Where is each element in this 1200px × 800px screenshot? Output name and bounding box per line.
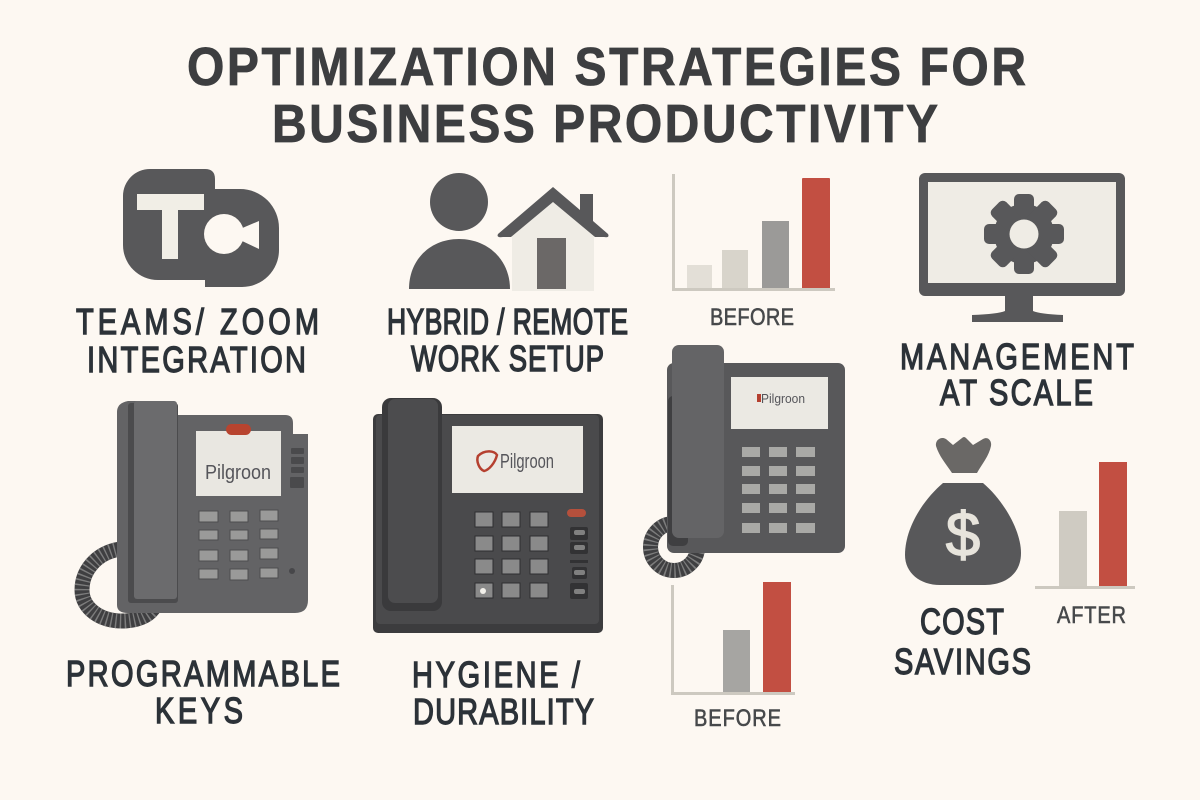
panel: Hybrid / remote work setup	[387, 173, 628, 379]
label: Programmable Keys	[66, 653, 340, 731]
icon: person and house	[409, 173, 608, 291]
label: Hygiene / Durability: HYGIENE /	[412, 654, 581, 695]
label: After: AFTER	[1057, 601, 1126, 628]
icon: money bag	[905, 437, 1021, 585]
panel: Teams / Zoom integration	[76, 169, 319, 380]
label: Management at Scale	[900, 336, 1134, 413]
panel: before bar chart, top	[672, 174, 835, 330]
bar chart: four rising bars	[672, 174, 835, 291]
label: Hygiene / Durability: DURABILITY	[413, 691, 594, 732]
label: Teams / Zoom Integration: INTEGRATION	[87, 339, 306, 380]
label: Before: BEFORE	[710, 303, 794, 330]
label: Cost Savings: SAVINGS	[894, 641, 1031, 682]
icon: T and camera badge	[123, 169, 279, 287]
title	[187, 36, 1026, 154]
panel: hygiene / durability	[373, 398, 603, 732]
icon: desk phone with side keys	[82, 401, 308, 621]
label: Management at Scale: MANAGEMENT	[900, 336, 1134, 377]
icon: desk phone with looped cord	[650, 345, 845, 570]
label: Programmable Keys: PROGRAMMABLE	[66, 653, 340, 694]
title: OPTIMIZATION STRATEGIES FOR	[187, 36, 1026, 97]
label: Hygiene / Durability	[412, 654, 594, 732]
bar chart: two bars	[671, 582, 795, 695]
icon: monitor with gear	[919, 173, 1125, 322]
icon: dark desk phone: Pilgroon	[500, 451, 554, 473]
label: Management at Scale: AT SCALE	[940, 372, 1093, 413]
panel: cost savings	[894, 437, 1135, 682]
label: Cost Savings	[894, 601, 1031, 682]
label: Programmable Keys: KEYS	[155, 690, 243, 731]
panel: programmable keys	[66, 401, 340, 731]
panel: third phone with before chart	[650, 345, 845, 731]
icon: dark desk phone	[373, 398, 603, 633]
title: BUSINESS PRODUCTIVITY	[272, 93, 938, 154]
icon: desk phone with looped cord: Pilgroon	[761, 391, 805, 406]
icon: money bag: $	[946, 501, 980, 570]
icon: desk phone with side keys: Pilgroon	[205, 462, 271, 484]
label: Teams / Zoom Integration: TEAMS/ ZOOM	[76, 301, 319, 342]
label: Before: BEFORE	[694, 704, 781, 731]
label: Hybrid / Remote Work Setup: WORK SETUP	[411, 338, 604, 379]
label: Hybrid / Remote Work Setup	[387, 301, 628, 379]
label: Hybrid / Remote Work Setup: HYBRID / REMOTE	[387, 301, 628, 342]
bar chart: after bars	[1035, 462, 1135, 589]
label: Cost Savings: COST	[920, 601, 1004, 642]
label: Teams / Zoom Integration	[76, 301, 319, 380]
panel: management at scale	[900, 173, 1134, 413]
